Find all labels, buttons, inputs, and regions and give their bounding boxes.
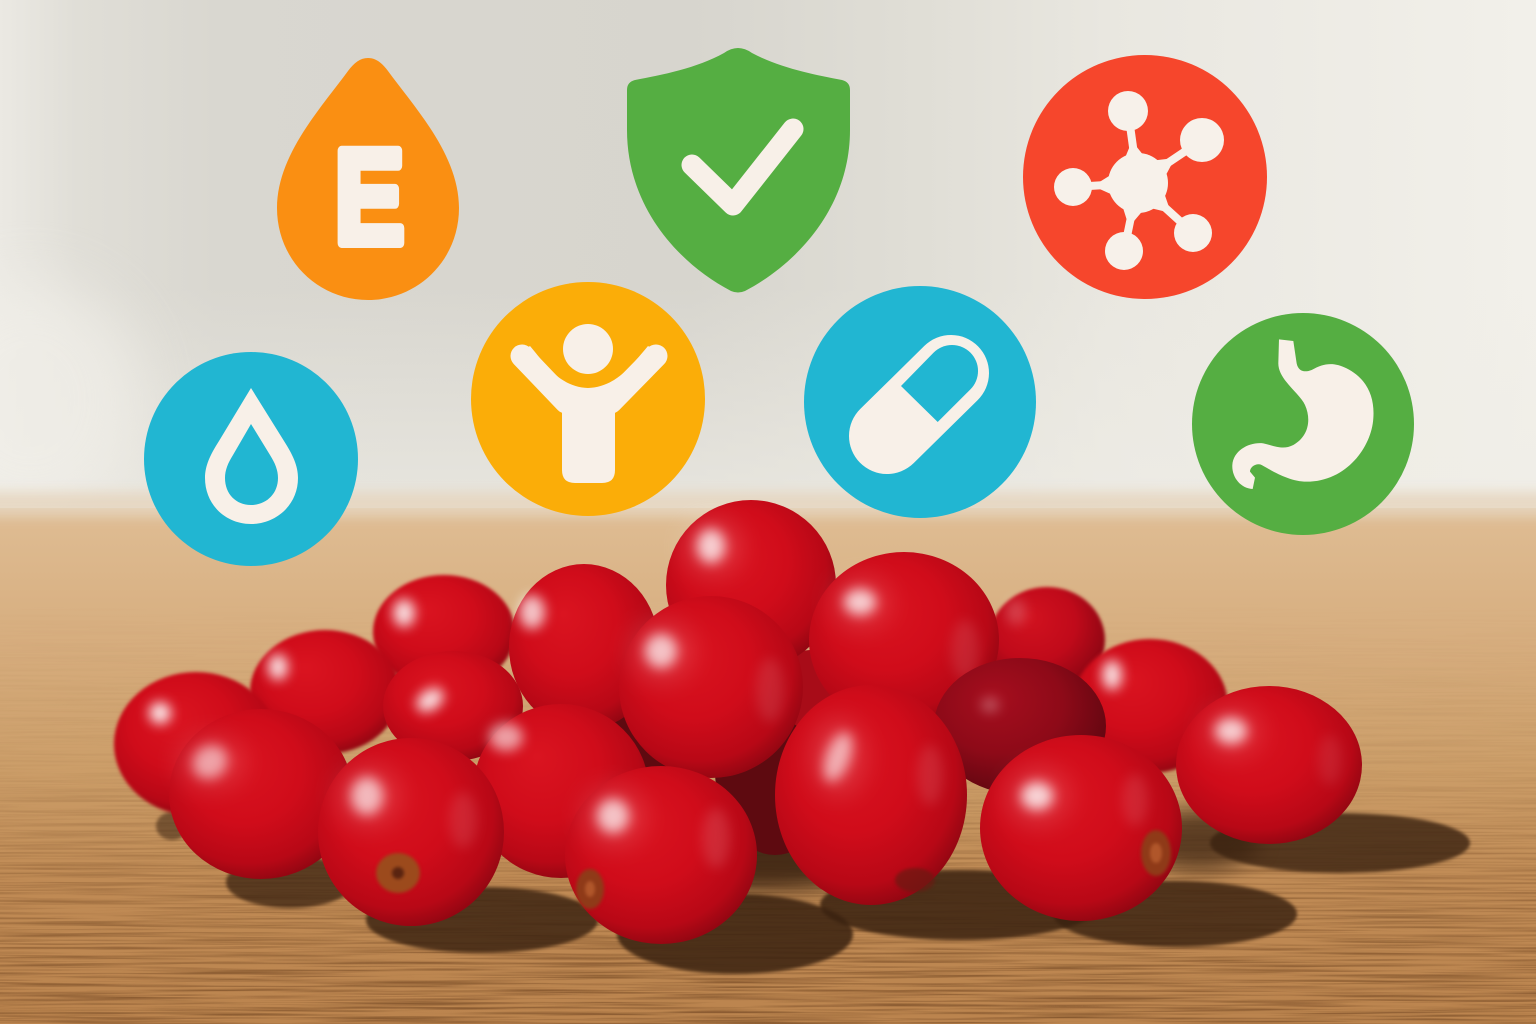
- calyx spot: [376, 853, 420, 893]
- berry: middle left: [383, 651, 523, 761]
- calyx spot: [1141, 830, 1171, 876]
- berry: back left middle: [250, 630, 400, 754]
- icon: water drop: [144, 352, 358, 566]
- berry: back right small: [989, 587, 1105, 693]
- wooden table: [0, 492, 1536, 1024]
- berry: far left: [114, 672, 278, 816]
- icon: person with raised arms: [471, 282, 705, 516]
- berry: dark middle right: [934, 658, 1106, 794]
- calyx spot: [895, 868, 935, 892]
- berry shadows: [156, 810, 1470, 974]
- cranberry pile: [114, 500, 1362, 944]
- background wall: [0, 0, 1536, 520]
- icon: capsule pill: [804, 286, 1036, 518]
- berry: top back: [666, 500, 836, 670]
- berry: right back: [1072, 639, 1228, 773]
- berry: centre front: [619, 596, 803, 778]
- check mark: [692, 129, 793, 205]
- icon: shield with check: [627, 48, 850, 292]
- icon: molecule network: [1023, 55, 1267, 299]
- berry: upper centre right: [809, 552, 999, 728]
- berry: middle front: [473, 704, 649, 878]
- berry: front left: [169, 709, 353, 879]
- letter E: E: [334, 123, 404, 272]
- berry: front right: [980, 735, 1182, 921]
- berry: upper centre left: [509, 564, 659, 730]
- berry: far right: [1176, 686, 1362, 844]
- berry: back left top: [373, 575, 515, 689]
- molecule: [1054, 91, 1224, 270]
- hidden dark berries: [600, 650, 840, 855]
- body: [511, 346, 667, 483]
- icon: stomach: [1192, 313, 1414, 535]
- head: [563, 324, 613, 374]
- calyx spot: [576, 869, 604, 909]
- berry: front with calyx: [318, 738, 504, 926]
- berry: front centre: [565, 766, 757, 944]
- berry: tall right centre: [775, 685, 967, 905]
- icon: vitamin E drop: [277, 58, 459, 300]
